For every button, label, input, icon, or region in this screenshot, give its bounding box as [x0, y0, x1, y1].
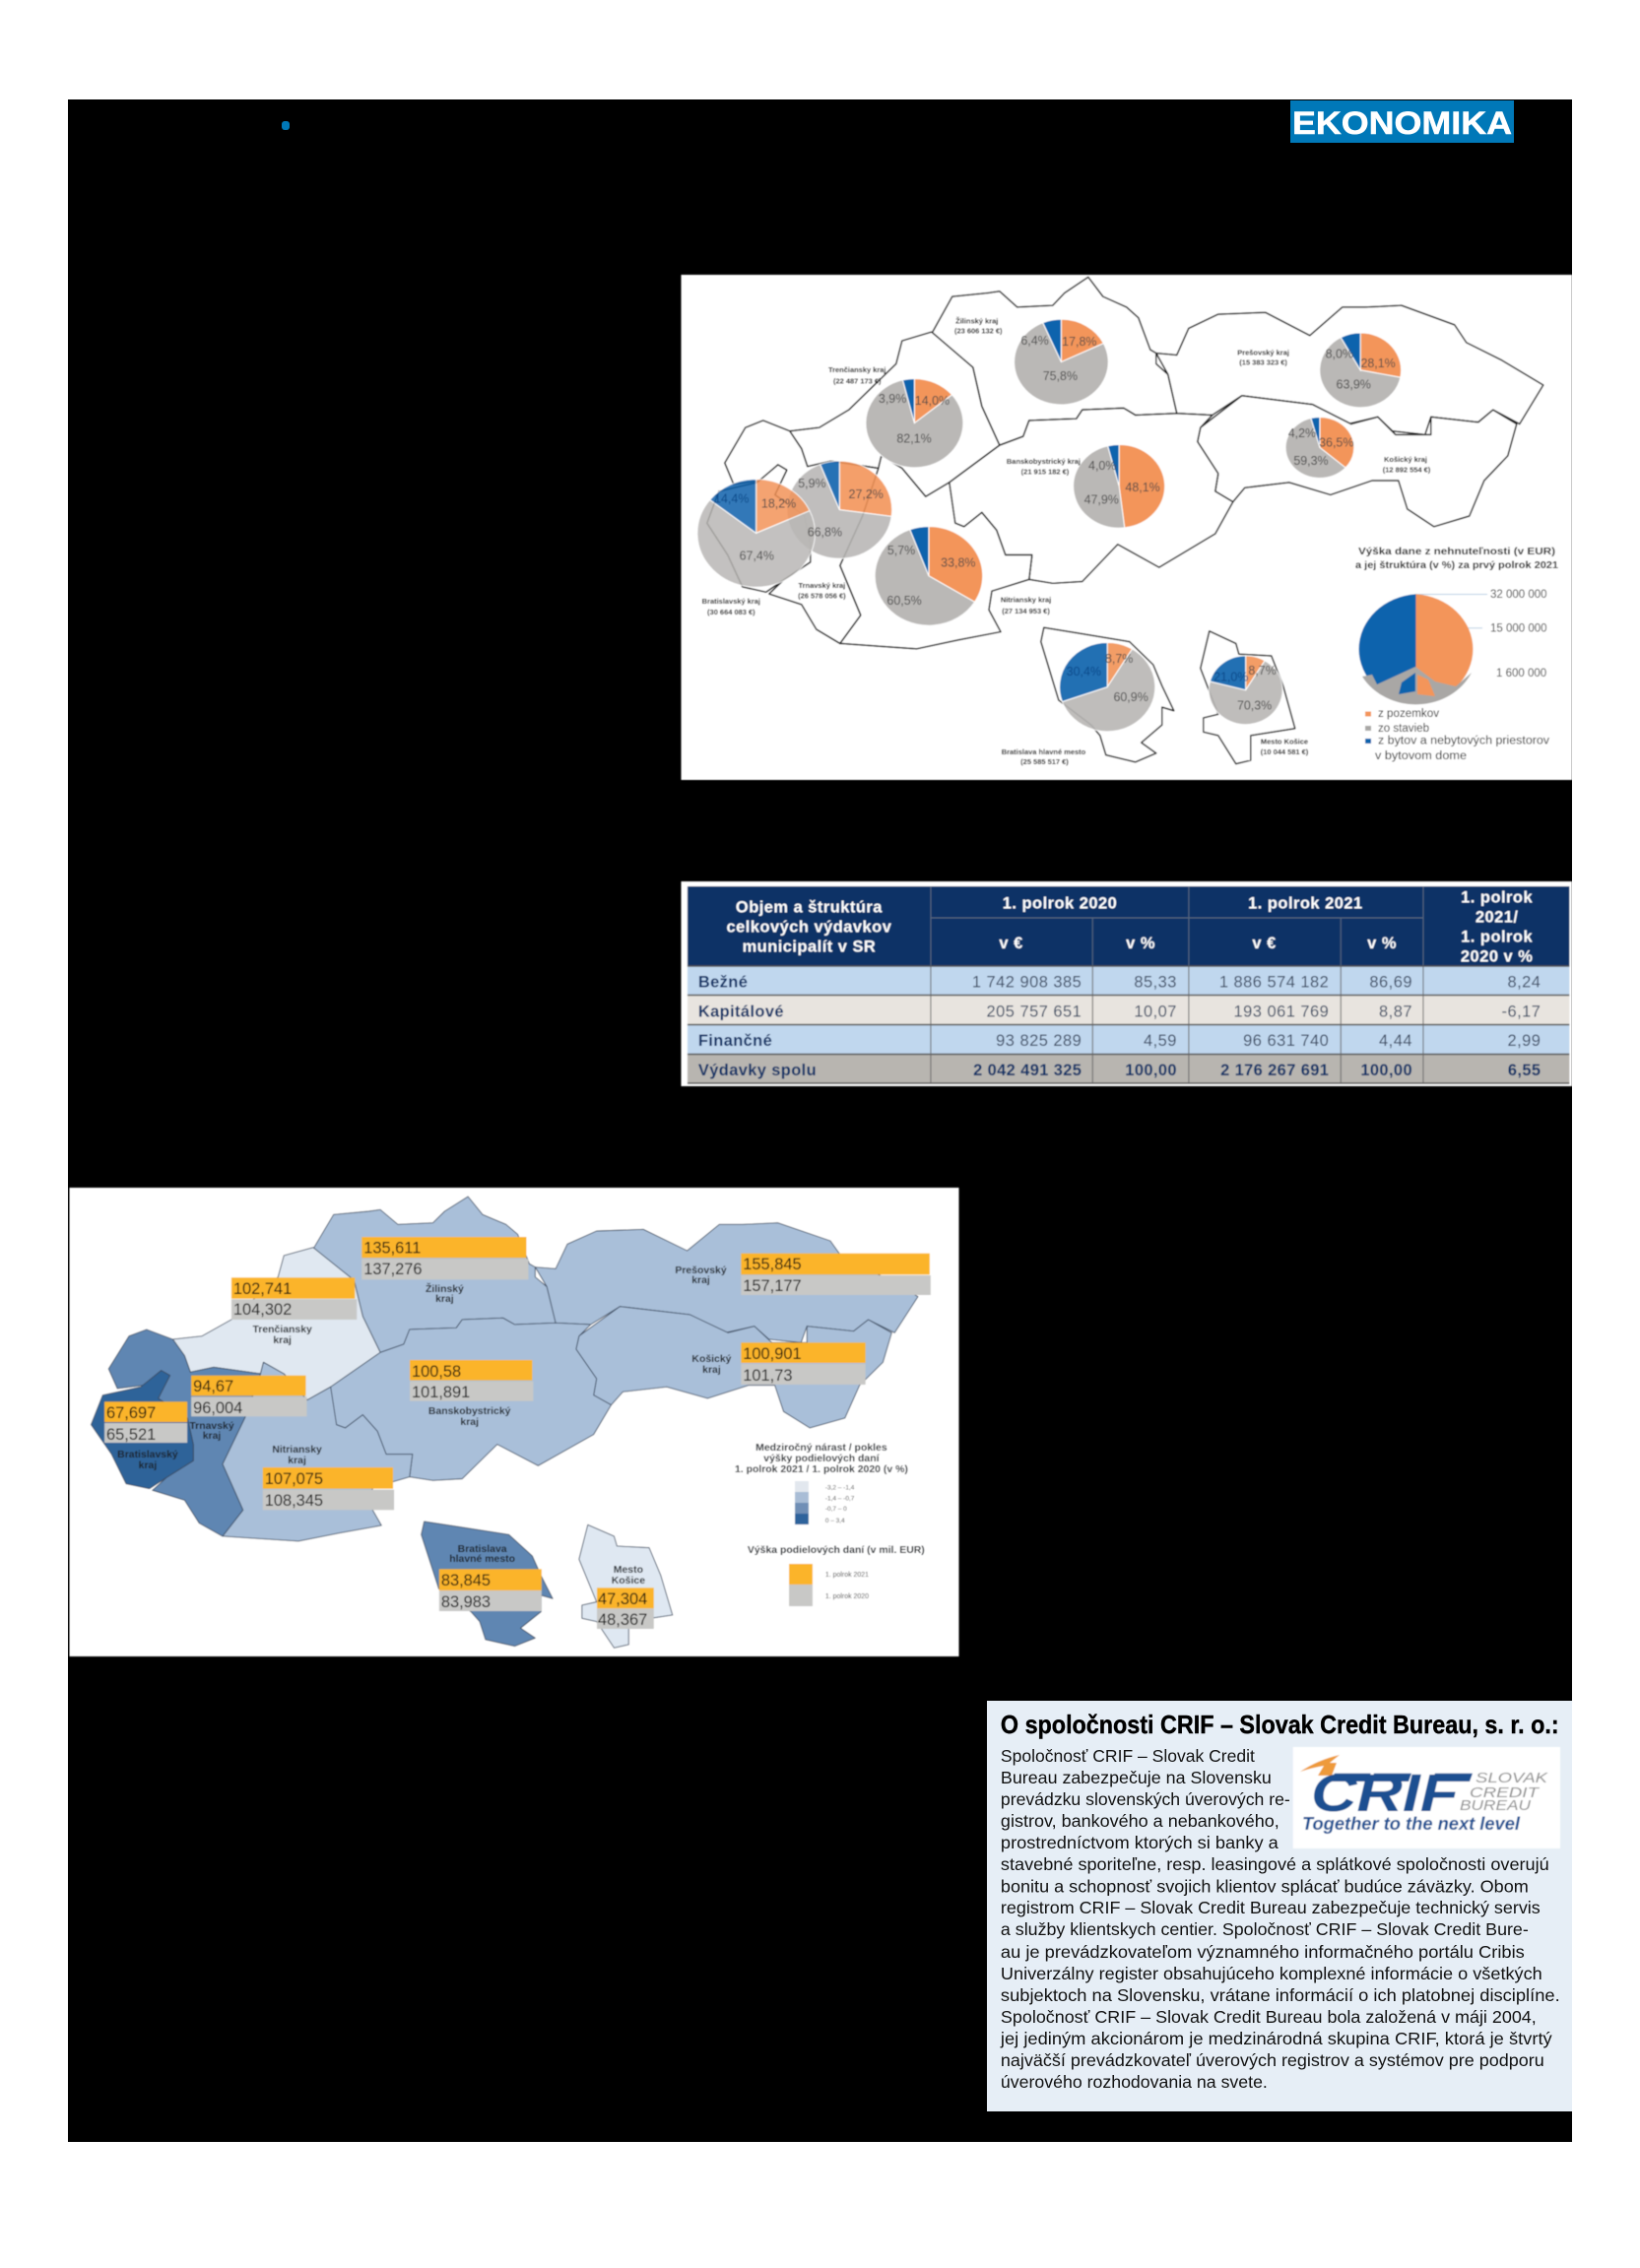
legend: categories	[1365, 708, 1549, 762]
pie percentage labels: 14,0%	[915, 394, 950, 408]
legend: year-on-year change: -3,2 – -1,4	[825, 1485, 855, 1492]
body text: najväčší prevádzkovateľ úverových registrov a systémov pre podporu	[1001, 2050, 1544, 2070]
bars: Bratislava hlavné mesto: 83,845	[441, 1572, 491, 1589]
table header: v €	[1252, 935, 1277, 952]
region labels: kraj	[691, 1275, 710, 1286]
legend: nested size pie: 1 600 000	[1496, 668, 1546, 680]
region labels	[117, 1265, 732, 1587]
icon: blue dot	[282, 121, 290, 130]
pie percentage labels: 27,2%	[849, 487, 884, 501]
table rows: 1 886 574 182	[1219, 974, 1329, 992]
table header: Objem a štruktúra	[736, 898, 883, 917]
legend: categories: zo stavieb	[1378, 723, 1429, 735]
table header: 1. polrok	[1461, 889, 1533, 907]
region labels: Košický	[691, 1354, 732, 1365]
pie percentage labels: 75,8%	[1043, 369, 1078, 383]
panel: expenditure table	[682, 881, 1572, 1086]
body text: prostredníctvom ktorých si banky a	[1001, 1833, 1279, 1852]
region name labels: Trnavský kraj	[799, 581, 845, 590]
pie percentage labels: 21,0%	[1214, 670, 1248, 683]
body text: jej jediným akcionárom je medzinárodná skupina CRIF, ktorá je štvrtý	[1000, 2029, 1552, 2048]
bars: Bratislavský: 67,697	[106, 1404, 156, 1422]
body text: bonitu a schopnosť svojich klientov splácať budúce záväzky. Obom	[1001, 1877, 1529, 1897]
pie percentage labels: 33,8%	[941, 555, 975, 570]
table header: celkových výdavkov	[727, 919, 892, 937]
logo: CRIF Slovak Credit Bureau	[1293, 1747, 1560, 1848]
body text: Bureau zabezpečuje na Slovensku	[1001, 1768, 1272, 1787]
pie percentage labels: 8,7%	[1105, 652, 1133, 666]
pie: Trnavský kraj	[787, 461, 892, 558]
body text: Univerzálny register obsahujúceho komplexné informácie o všetkých	[1001, 1964, 1542, 1983]
bars: Banskobystrický: 101,891	[412, 1384, 470, 1401]
table rows: 93 825 289	[996, 1032, 1082, 1050]
region name labels: (26 578 056 €)	[798, 591, 846, 601]
body text: subjektoch na Slovensku, vrátane informácií o ich platobnej disciplíne.	[1001, 1985, 1560, 2005]
logo: CRIF Slovak Credit Bureau: SLOVAK	[1476, 1770, 1548, 1786]
choropleth regions	[91, 1197, 918, 1648]
region name labels: Nitriansky kraj	[1001, 596, 1051, 605]
pie: Košický kraj	[1285, 417, 1354, 479]
legend title	[1355, 546, 1558, 571]
bars: Mesto Košice	[597, 1588, 654, 1629]
bars: Trnavský: 96,004	[193, 1399, 242, 1417]
bars: Trenčiansky: 104,302	[233, 1301, 292, 1319]
bars: Nitriansky: 107,075	[265, 1470, 323, 1488]
bars: Bratislavský: 65,521	[106, 1426, 156, 1444]
pie percentage labels	[714, 334, 1396, 712]
table header: v %	[1126, 935, 1155, 952]
region labels: kraj	[460, 1417, 479, 1428]
region name labels: (25 585 517 €)	[1020, 757, 1069, 766]
table rows: Finančné	[698, 1032, 772, 1050]
region labels: Trenčiansky	[252, 1325, 312, 1335]
legend: year-on-year change: 1. polrok 2021 / 1. polrok 2020 (v %)	[735, 1464, 908, 1475]
region labels: hlavné mesto	[449, 1554, 515, 1565]
panel: property tax map	[682, 275, 1572, 780]
pie percentage labels: 59,3%	[1293, 454, 1329, 468]
legend: year-on-year change: -0,7 – 0	[825, 1506, 847, 1513]
body text: stavebné sporiteľne, resp. leasingové a splátkové spoločnosti overujú	[1001, 1854, 1549, 1874]
pie percentage labels: 5,9%	[798, 477, 826, 490]
region labels: Košice	[612, 1576, 645, 1587]
pie percentage labels: 70,3%	[1237, 698, 1272, 712]
body text: registrom CRIF – Slovak Credit Bureau zabezpečuje technický servis	[1001, 1898, 1541, 1917]
legend: year-on-year change: -1,4 – -0,7	[825, 1496, 855, 1503]
table rows: 10,07	[1134, 1004, 1177, 1021]
region labels: Nitriansky	[272, 1445, 322, 1456]
region name labels: Bratislava hlavné mesto	[1002, 747, 1086, 756]
pie percentage labels: 82,1%	[896, 431, 932, 445]
bars: Nitriansky: 108,345	[265, 1492, 323, 1510]
pie percentage labels: 4,2%	[1288, 426, 1316, 440]
table rows: 86,69	[1369, 974, 1412, 992]
logo: CRIF Slovak Credit Bureau: CREDIT	[1470, 1784, 1541, 1801]
region labels: kraj	[203, 1431, 221, 1442]
region name labels: Žilinský kraj	[955, 316, 998, 325]
table rows: 205 757 651	[987, 1004, 1082, 1021]
bars: Bratislavský	[104, 1401, 187, 1444]
bars: Košický: 101,73	[743, 1367, 793, 1385]
bars: Žilinský: 137,276	[363, 1261, 423, 1278]
pie: Prešovský kraj	[1320, 333, 1402, 408]
table rows: 2 042 491 325	[973, 1062, 1082, 1079]
table rows: 2 176 267 691	[1220, 1062, 1329, 1079]
region name labels: (22 487 173 €)	[833, 376, 882, 385]
body text: au je prevádzkovateľom významného informačného portálu Cribis	[1001, 1942, 1525, 1962]
pie percentage labels: 67,4%	[740, 549, 774, 562]
pie percentage labels: 8,7%	[1248, 664, 1277, 678]
panel: shared taxes map	[69, 1188, 959, 1656]
region name labels: Prešovský kraj	[1237, 348, 1289, 356]
pie: Banskobystrický kraj	[1074, 444, 1165, 528]
region labels: kraj	[288, 1456, 306, 1466]
region labels: Prešovský	[675, 1265, 727, 1276]
region name labels: (15 383 323 €)	[1239, 358, 1287, 367]
pie percentage labels: 30,4%	[1067, 665, 1101, 679]
region name labels: (30 664 083 €)	[707, 608, 755, 616]
bars: Bratislava hlavné mesto: 83,983	[441, 1593, 491, 1611]
region name labels: Bratislavský kraj	[702, 597, 760, 606]
bars: Trenčiansky	[231, 1277, 357, 1320]
body text: úverového rozhodovania na svete.	[1001, 2072, 1268, 2092]
body text: a služby klientskych centier. Spoločnosť CRIF – Slovak Credit Bure-	[1001, 1919, 1529, 1939]
table rows: 8,87	[1379, 1004, 1412, 1021]
pie percentage labels: 36,5%	[1319, 435, 1353, 450]
region labels: Banskobystrický	[428, 1406, 511, 1417]
table rows: 6,55	[1508, 1062, 1541, 1079]
legend title: a jej štruktúra (v %) za prvý polrok 2021	[1355, 559, 1558, 571]
heading: O spoločnosti CRIF – Slovak Credit Bureau, s. r. o.:	[1001, 1712, 1559, 1739]
legend: year-on-year change: výšky podielových daní	[763, 1454, 881, 1464]
region name labels: Banskobystrický kraj	[1007, 457, 1081, 466]
legend: categories: z bytov a nebytových priestorov	[1378, 736, 1549, 747]
table rows: Bežné	[698, 974, 748, 992]
region labels: Žilinský	[426, 1282, 464, 1295]
bars: Trenčiansky: 102,741	[233, 1280, 292, 1298]
legend: year-on-year change: 0 – 3,4	[825, 1518, 845, 1524]
table header: v %	[1367, 935, 1397, 952]
table header: 2021/	[1476, 909, 1518, 927]
pie percentage labels: 4,0%	[1088, 459, 1116, 473]
table rows: 1 742 908 385	[972, 974, 1082, 992]
table rows: 8,24	[1507, 974, 1541, 992]
pie percentage labels: 48,1%	[1125, 481, 1160, 494]
section tag: EKONOMIKA: EKONOMIKA	[1292, 105, 1512, 141]
table rows: 100,00	[1125, 1062, 1177, 1079]
pie: Trenčiansky kraj	[866, 378, 963, 468]
body text: gistrov, bankového a nebankového,	[1001, 1811, 1279, 1831]
table rows	[688, 966, 1569, 1083]
pie percentage labels: 60,5%	[886, 594, 922, 608]
region labels: Bratislavský	[117, 1450, 178, 1460]
pie: Nitriansky kraj	[875, 526, 983, 625]
region name labels	[702, 316, 1431, 766]
region name labels: (27 134 953 €)	[1002, 607, 1050, 616]
pie percentage labels: 47,9%	[1084, 492, 1119, 506]
table rows: -6,17	[1502, 1004, 1541, 1021]
map outline of regions	[707, 277, 1543, 764]
bars: Bratislava hlavné mesto	[439, 1569, 542, 1611]
region name labels: (12 892 554 €)	[1383, 465, 1431, 474]
pie percentage labels: 60,9%	[1113, 690, 1148, 704]
region name labels: (21 915 182 €)	[1021, 467, 1070, 476]
table header	[688, 886, 1569, 1083]
table rows: 85,33	[1134, 974, 1177, 992]
bars: Mesto Košice: 48,367	[598, 1611, 647, 1629]
legend: year-on-year change: Medziročný nárast / pokles	[755, 1443, 887, 1454]
body text: prevádzku slovenských úverových re-	[1001, 1789, 1290, 1809]
pie percentage labels: 3,9%	[879, 392, 906, 406]
region name labels: Košický kraj	[1384, 455, 1427, 464]
panel: about CRIF	[987, 1701, 1572, 2111]
region labels: Trnavský	[189, 1421, 234, 1432]
region labels: kraj	[435, 1294, 454, 1305]
region name labels: (10 044 581 €)	[1261, 747, 1309, 756]
region labels: kraj	[139, 1460, 157, 1471]
legend title: Výška dane z nehnuteľnosti (v EUR)	[1358, 546, 1555, 557]
body text	[1000, 1746, 1560, 2092]
table rows: 96 631 740	[1243, 1032, 1329, 1050]
bars: Žilinský	[361, 1237, 528, 1279]
table rows: 4,59	[1144, 1032, 1177, 1050]
legend: nested size pie: 32 000 000	[1490, 589, 1547, 601]
logo: CRIF Slovak Credit Bureau: CRIF	[1311, 1764, 1461, 1823]
legend: nested size pie	[1359, 589, 1547, 704]
pie percentage labels: 66,8%	[808, 525, 842, 540]
table rows: 2,99	[1507, 1032, 1541, 1050]
bars: Prešovský: 155,845	[743, 1256, 802, 1273]
bars: Nitriansky	[263, 1467, 394, 1510]
table rows: 193 061 769	[1234, 1004, 1329, 1021]
table header: municipalít v SR	[743, 939, 876, 956]
logo: CRIF Slovak Credit Bureau: Together to the next level	[1302, 1814, 1521, 1834]
pie percentage labels: 28,1%	[1360, 356, 1396, 370]
pie percentage labels: 18,2%	[761, 496, 796, 511]
table header: 2020 v %	[1461, 948, 1533, 966]
legend: nested size pie: 15 000 000	[1490, 623, 1547, 635]
bars: Košický	[741, 1342, 866, 1385]
table rows: Výdavky spolu	[698, 1062, 817, 1079]
bars: Košický: 100,901	[743, 1345, 802, 1363]
pie percentage labels: 17,8%	[1062, 335, 1096, 349]
pie: Mesto Košice	[1209, 656, 1282, 725]
body text: Spoločnosť CRIF – Slovak Credit Bureau bola založená v máji 2004,	[1001, 2007, 1537, 2027]
legend: shared tax amounts: 1. polrok 2021	[825, 1572, 869, 1579]
region labels: kraj	[702, 1365, 721, 1376]
region name labels: Mesto Košice	[1261, 737, 1308, 746]
bars: Žilinský: 135,611	[363, 1240, 421, 1258]
table rows: 100,00	[1360, 1062, 1412, 1079]
bars: Trnavský: 94,67	[193, 1378, 233, 1395]
region name labels: (23 606 132 €)	[954, 326, 1003, 336]
table header: 1. polrok 2021	[1248, 895, 1363, 913]
pie percentage labels: 5,7%	[887, 544, 915, 557]
bars: Trnavský	[191, 1376, 307, 1417]
legend: shared tax amounts: 1. polrok 2020	[825, 1593, 869, 1600]
legend: categories: z pozemkov	[1378, 708, 1439, 720]
legend: year-on-year change	[735, 1443, 908, 1524]
pie: Bratislava hlavné mesto	[1060, 642, 1155, 732]
pie: Bratislavský kraj	[697, 480, 815, 587]
pie percentage labels: 63,9%	[1337, 377, 1371, 392]
region labels: Mesto	[614, 1565, 643, 1576]
pie percentage labels: 6,4%	[1020, 334, 1049, 348]
region labels: kraj	[273, 1335, 292, 1346]
bars: Banskobystrický: 100,58	[412, 1363, 461, 1381]
table header: v €	[999, 935, 1023, 952]
table rows: 4,44	[1379, 1032, 1412, 1050]
table rows: Kapitálové	[698, 1004, 784, 1021]
legend: shared tax amounts: Výška podielových daní (v mil. EUR)	[748, 1545, 925, 1556]
bars: Banskobystrický	[410, 1360, 533, 1401]
logo: CRIF Slovak Credit Bureau: BUREAU	[1460, 1797, 1531, 1814]
region labels: Bratislava	[458, 1544, 507, 1555]
pie percentage labels: 8,0%	[1326, 347, 1353, 361]
table header: 1. polrok	[1461, 929, 1533, 946]
pie: Žilinský kraj	[1015, 319, 1108, 405]
body text: Spoločnosť CRIF – Slovak Credit	[1001, 1746, 1255, 1766]
bars: Prešovský	[741, 1254, 931, 1295]
pie percentage labels: 14,4%	[714, 491, 749, 505]
region name labels: Trenčiansky kraj	[828, 365, 886, 374]
legend: shared tax amounts	[748, 1545, 925, 1606]
bars: Mesto Košice: 47,304	[598, 1590, 647, 1608]
legend: categories: v bytovom dome	[1375, 750, 1467, 762]
table header: 1. polrok 2020	[1003, 895, 1117, 913]
bars: Prešovský: 157,177	[743, 1277, 802, 1295]
